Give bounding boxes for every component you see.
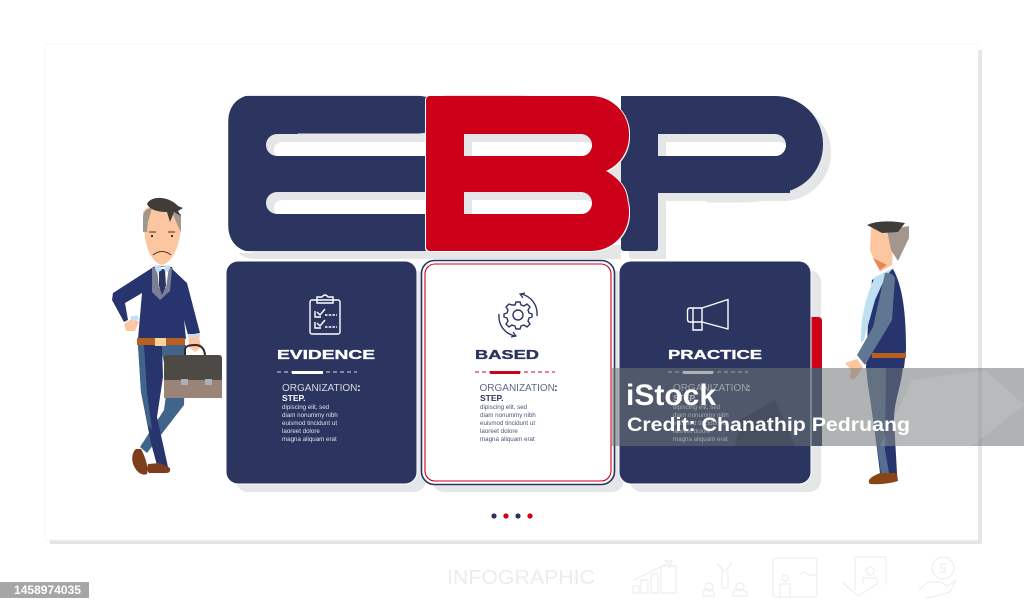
shoes: [132, 449, 148, 475]
letters E and P with offset shadow: P: [614, 66, 819, 280]
text: based body: magna aliquam erat: [480, 436, 535, 443]
text: evidence body: diam nonummy nibh: [282, 412, 338, 419]
divider: [277, 371, 357, 374]
text: based body: euismod tincidunt ut: [480, 420, 535, 427]
text: evidence body: euismod tincidunt ut: [282, 420, 337, 427]
icon: puzzle: [773, 558, 817, 597]
text: based body: [480, 382, 558, 443]
text: practice body: :: [747, 382, 751, 394]
text: evidence body: magna aliquam erat: [282, 436, 337, 443]
navy tab behind practice card: [811, 368, 822, 446]
text: practice body: diam nonummy nibh: [673, 412, 729, 419]
text: evidence body: laoreet dolore: [282, 428, 320, 435]
letters E and P with offset shadow: [221, 66, 823, 280]
heading: evidence: EVIDENCE: [277, 347, 375, 362]
watermark credit: Credit: Chanathip Pedruang: [627, 415, 910, 436]
text: evidence body: [282, 382, 361, 443]
image id tag: [0, 582, 89, 598]
panel: evidence: [226, 261, 417, 484]
figure: standing man in profile: [845, 221, 909, 484]
heading: based: BASED: [475, 347, 539, 362]
text: practice body: [673, 382, 751, 443]
letters E and P with offset shadow: E: [221, 66, 439, 280]
title: EBP big letters: [221, 66, 823, 281]
arm: [857, 273, 895, 365]
rounded outer corners of E: [226, 94, 256, 253]
text: practice body: dipiscing elit, sed: [673, 404, 721, 411]
shadow under B: [434, 150, 621, 259]
belt: [137, 338, 185, 345]
watermark logo: iStock: [626, 379, 716, 412]
text: evidence body: STEP.: [282, 393, 305, 403]
hands: [124, 318, 139, 331]
panel: practice: [619, 261, 811, 484]
heading: practice: PRACTICE: [668, 347, 762, 362]
watermark band: [612, 368, 1024, 446]
near leg: [138, 345, 168, 469]
far leg: [140, 345, 186, 453]
counters of P: [658, 134, 790, 262]
belt: [872, 353, 906, 358]
hanging arm: [170, 267, 200, 335]
briefcase: [185, 345, 205, 355]
divider: [475, 371, 555, 374]
panel: card shadows: [236, 270, 821, 492]
text: based body: laoreet dolore: [480, 428, 518, 435]
hair: [147, 198, 183, 222]
text: evidence body: ORGANIZATION: [282, 383, 357, 394]
icon: people: [703, 563, 747, 596]
text: practice body: euismod tincidunt ut: [673, 420, 728, 427]
vest: [866, 269, 906, 368]
icon: growth chart: [633, 561, 676, 593]
hair: [887, 226, 909, 261]
hand: [845, 359, 863, 380]
icon: gear with arrows: [499, 293, 537, 337]
text: evidence body: dipiscing elit, sed: [282, 404, 330, 411]
face features: [149, 232, 175, 255]
panel: slide background with shadow: [45, 44, 982, 544]
neck and face: [870, 228, 894, 272]
text: based body: STEP.: [480, 393, 503, 403]
text: practice body: laoreet dolore: [673, 428, 711, 435]
counters of E: [266, 134, 430, 214]
counters of B: [464, 134, 592, 214]
text: practice body: magna aliquam erat: [673, 436, 728, 443]
text: practice body: ORGANIZATION: [673, 383, 748, 394]
letter B: B: [419, 66, 625, 281]
cuffs: [130, 315, 200, 337]
footer icons: [633, 557, 956, 598]
text: practice body: STEP.: [673, 393, 696, 403]
figure: man with briefcase: [112, 198, 222, 475]
shirt: [861, 268, 893, 343]
panel: based: [422, 260, 614, 484]
text: based body: dipiscing elit, sed: [480, 404, 528, 411]
pagination dots: [491, 513, 533, 519]
footer: infographic label: INFOGRAPHIC: [447, 567, 595, 589]
text: based body: :: [554, 382, 558, 394]
icon: presentation hand: [843, 557, 886, 596]
image id tag: 1458974035: [14, 585, 82, 597]
text: based body: ORGANIZATION: [480, 383, 555, 394]
neck and head: [143, 205, 181, 265]
icon: clipboard: [310, 295, 340, 334]
divider: [668, 371, 748, 374]
icon: megaphone: [688, 300, 728, 330]
trousers: [866, 365, 903, 473]
jacket torso: [112, 266, 186, 339]
text: evidence body: :: [357, 382, 361, 394]
text: based body: diam nonummy nibh: [480, 412, 536, 419]
red tab behind practice card: [811, 317, 822, 368]
lapel and shirt: [152, 268, 172, 300]
icon: money hand: [919, 557, 956, 598]
shoe: [869, 473, 898, 484]
